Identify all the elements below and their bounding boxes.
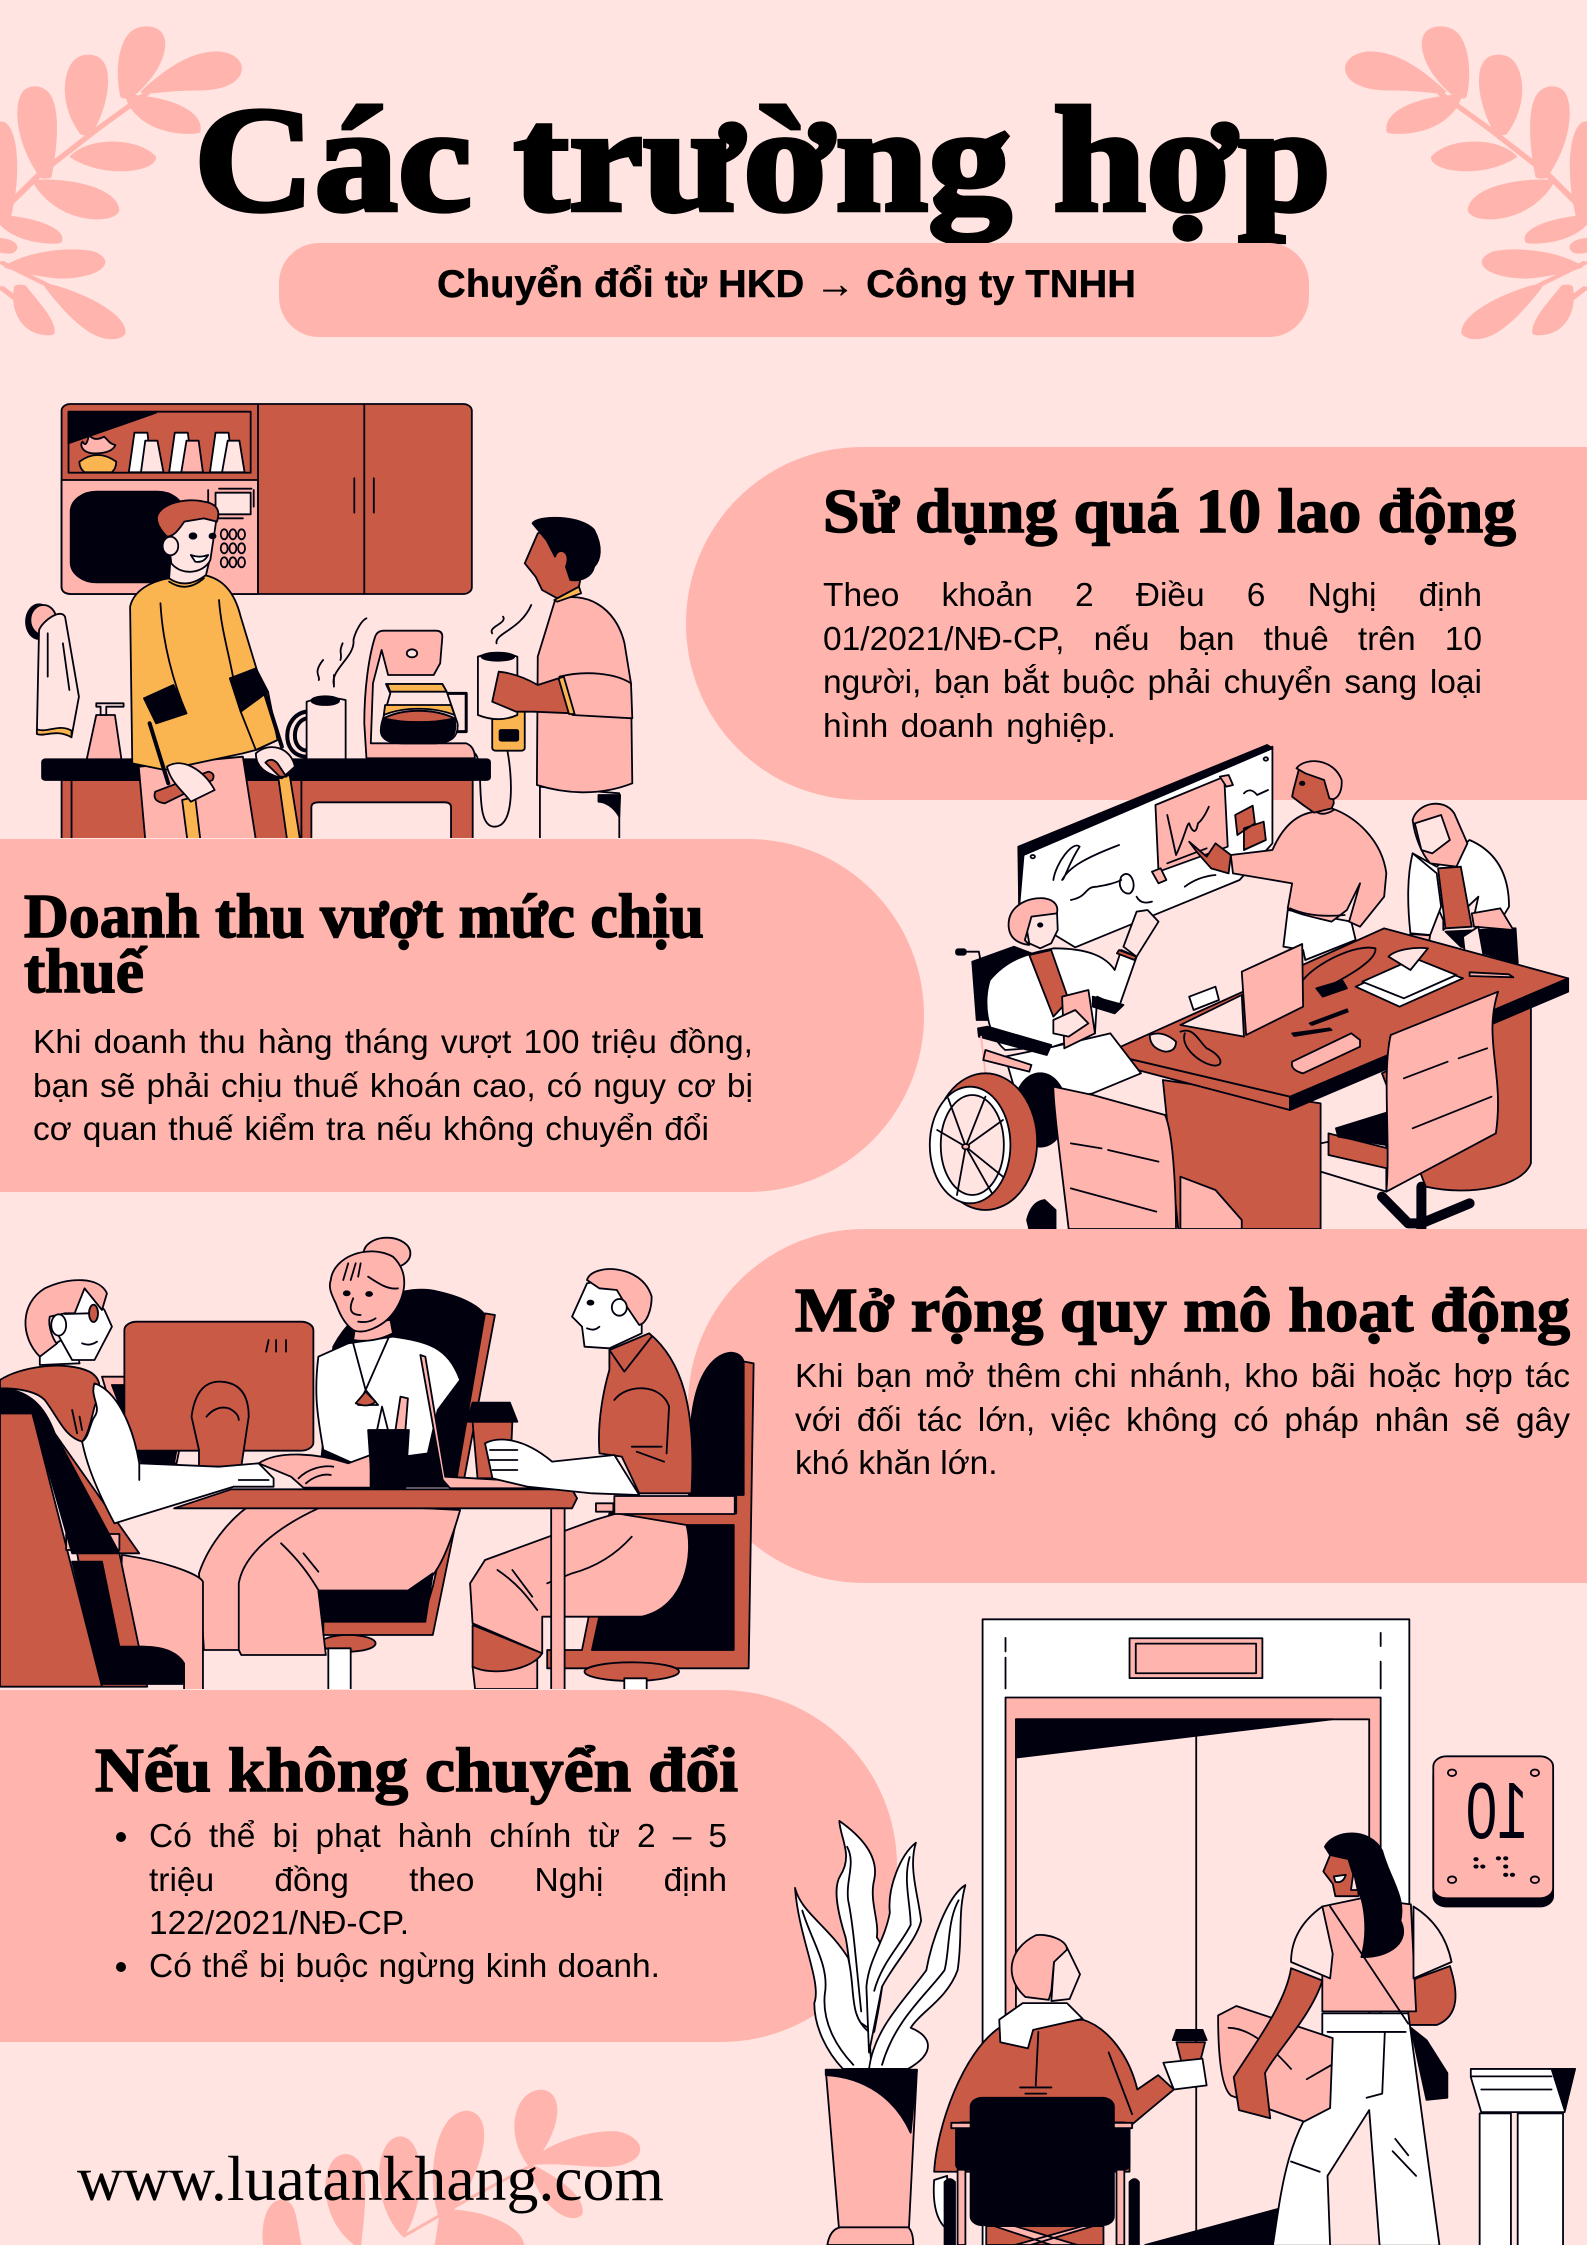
panel: nếu không chuyển đổi: [0, 1690, 897, 2042]
woman in the centre: [199, 1238, 460, 1655]
body text: hình doanh nghiệp.: [823, 708, 1116, 744]
coffee maker: [364, 631, 475, 758]
floor number sign: [1433, 1756, 1553, 1906]
standing presenter: [1189, 761, 1386, 960]
decorative leaves: top corners: [0, 26, 1587, 340]
towel on hook: [26, 604, 79, 737]
soap dispenser: [87, 703, 124, 759]
man with crutches: [130, 500, 300, 840]
woman in wheelchair: [930, 898, 1159, 1229]
bullet list: triệu đồng theo Nghị định: [149, 1862, 727, 1899]
panel: vượt 10 lao động: [686, 447, 1587, 800]
website footer: www.luatankhang.com: [77, 2143, 664, 2214]
body text: [33, 1024, 753, 1148]
heading: Nếu không chuyển đổi: [95, 1737, 738, 1805]
illustration: three coworkers around a table: [0, 1236, 755, 1689]
wall cabinet and microwave: [62, 404, 472, 594]
potted plant: [795, 1821, 965, 2245]
body text: khó khăn lớn.: [795, 1445, 998, 1482]
heading: thuế: [24, 938, 148, 1006]
body text: Theo khoản 2 Điều 6 Nghị định: [823, 577, 1482, 614]
body text: 01/2021/NĐ-CP, nếu bạn thuê trên 10: [823, 620, 1482, 658]
bullet two: [116, 1962, 126, 1972]
panel: mở rộng quy mô hoạt động: [688, 1229, 1587, 1583]
bullet list: Có thể bị phạt hành chính từ 2 – 5: [149, 1818, 727, 1855]
title: Các trường hợp: [194, 77, 1331, 243]
body text: Khi doanh thu hàng tháng vượt 100 triệu đồng,: [33, 1024, 753, 1061]
bullet list: [116, 1818, 727, 1985]
books on shelf: [1328, 1110, 1395, 1170]
woman with bag: [1218, 1833, 1456, 2245]
side table: [1471, 2069, 1575, 2245]
subtitle pill: [279, 243, 1309, 337]
subtitle text: Chuyển đổi từ HKD → Công ty TNHH: [437, 263, 1136, 306]
heading: [24, 884, 704, 1006]
wall outlet and cord: [475, 710, 525, 827]
heading: Sử dụng quá 10 lao động: [823, 478, 1516, 546]
body text: cơ quan thuế kiểm tra nếu không chuyển đổi: [33, 1111, 709, 1148]
bullet list: Có thể bị buộc ngừng kinh doanh.: [149, 1948, 660, 1985]
body text: [795, 1358, 1570, 1482]
man in wheelchair: [934, 1935, 1207, 2245]
counter: [42, 759, 490, 840]
whiteboard: [1018, 745, 1272, 947]
man holding a mug: [478, 518, 632, 840]
illustration: office meeting at a whiteboard with wheelchair user: [928, 744, 1570, 1229]
computer monitor and screen: [102, 1322, 313, 1467]
body text: với đối tác lớn, việc không có pháp nhân sẽ gây: [795, 1402, 1570, 1438]
bullet list: 122/2021/NĐ-CP.: [149, 1905, 409, 1942]
body text: bạn sẽ phải chịu thuế khoán cao, có nguy cơ bị: [33, 1068, 753, 1104]
panel: doanh thu vượt mức chịu thuế: [0, 839, 924, 1192]
desk with laptop and papers: [1106, 928, 1568, 1229]
man on the left: [0, 1280, 274, 1692]
decorative leaves: bottom centre: [262, 2090, 640, 2245]
heading: Doanh thu vượt mức chịu: [24, 884, 704, 951]
centre chair: [318, 1290, 495, 1692]
man on the right: [470, 1269, 735, 1689]
heading: Mở rộng quy mô hoạt động: [795, 1277, 1570, 1345]
mug with steam: [287, 618, 366, 759]
woman in hijab: [1389, 804, 1518, 970]
table with cup, pens and laptop: [174, 1355, 639, 1695]
body text: Khi bạn mở thêm chi nhánh, kho bãi hoặc hợp tác: [795, 1358, 1570, 1395]
floor number sign: 10: [1466, 1765, 1528, 1855]
body text: người, bạn bắt buộc phải chuyển sang loại: [823, 664, 1482, 701]
illustration: elevator lobby with wheelchair user and woman: [794, 1618, 1576, 2245]
elevator: [983, 1619, 1409, 2245]
illustration: kitchen scene with two men and coffee: [25, 403, 634, 838]
bullet one: [116, 1832, 126, 1842]
right man chair: [547, 1353, 754, 1692]
office chair right: [1382, 992, 1498, 1229]
office chair front with bag: [1053, 1087, 1242, 1229]
body text: [823, 577, 1482, 744]
